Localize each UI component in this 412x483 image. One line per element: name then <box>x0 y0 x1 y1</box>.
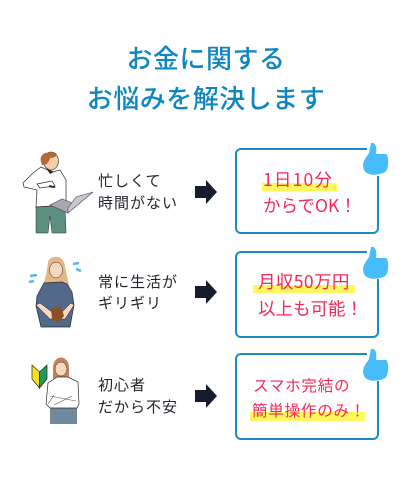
highlight <box>253 285 355 293</box>
text: solution 3: 簡単操作のみ！ <box>252 399 366 421</box>
title: お悩みを解決します <box>87 79 325 116</box>
text: busy: 忙しくて <box>98 170 162 191</box>
panel: solution 2 <box>236 247 388 337</box>
illustration: beginner woman with arms crossed <box>32 358 79 424</box>
panel: solution 3 <box>236 349 388 439</box>
text: solution 1: からでOK！ <box>263 193 357 218</box>
text: living paycheck: ギリギリ <box>98 292 162 313</box>
arrow 2 <box>195 280 217 304</box>
text: living paycheck: 常に生活が <box>98 271 178 292</box>
text: solution 3: スマホ完結の <box>253 374 350 396</box>
panel: solution 1 <box>236 143 388 233</box>
text: living paycheck <box>98 271 178 313</box>
text: beginner <box>98 374 178 417</box>
icon: beginner mark <box>32 365 47 388</box>
highlight <box>250 412 365 421</box>
icon: thumbs up <box>363 143 388 175</box>
text: solution 1 <box>263 167 357 218</box>
text: solution 3 <box>252 374 366 421</box>
icon: thumbs up <box>363 349 388 381</box>
text: busy <box>98 170 178 213</box>
title: お金に関する <box>126 39 286 76</box>
text: solution 2 <box>258 269 363 321</box>
text: solution 2: 以上も可能！ <box>258 296 363 321</box>
icon: thumbs up <box>363 247 388 279</box>
text: beginner: 初心者 <box>98 374 146 395</box>
arrow 1 <box>195 180 217 204</box>
text: solution 2: 月収50万円 <box>258 269 350 294</box>
illustration: busy man with laptop <box>23 152 93 233</box>
illustration: worried woman with wallet <box>29 257 81 327</box>
arrow 3 <box>195 384 217 408</box>
text: busy: 時間がない <box>98 192 178 213</box>
text: solution 1: 1日10分 <box>263 167 333 192</box>
title <box>87 39 325 116</box>
text: beginner: だから不安 <box>98 396 178 417</box>
highlight <box>262 183 337 191</box>
